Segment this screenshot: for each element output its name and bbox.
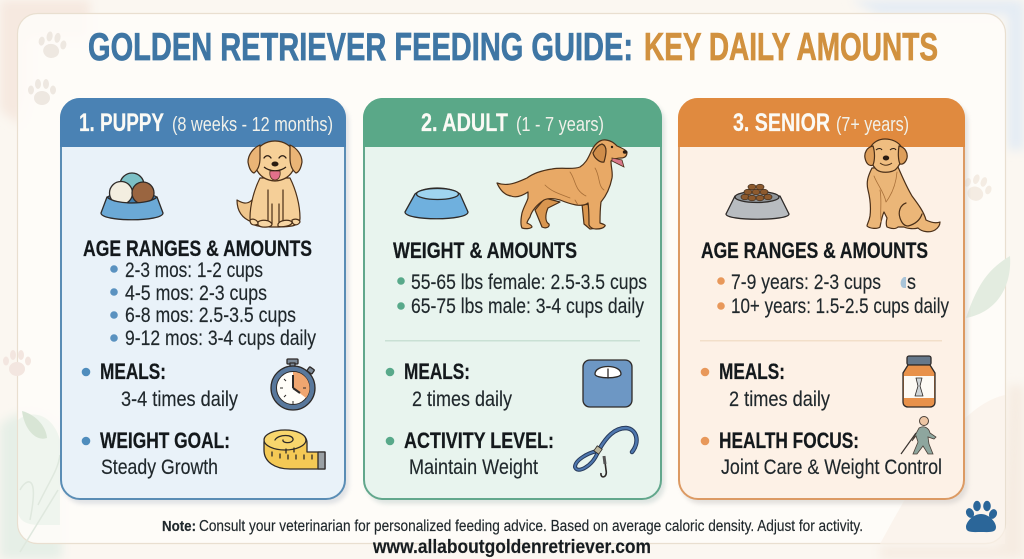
adult header bbox=[363, 98, 662, 147]
icon: food bowl with kibble scoops bbox=[101, 173, 163, 220]
panel: puppy bbox=[60, 98, 349, 504]
meals: 2 times daily bbox=[729, 388, 830, 411]
weight goal: Steady Growth bbox=[101, 456, 218, 479]
amounts list: 2-3 mos: 1-2 cups bbox=[125, 259, 263, 282]
decorative paw prints bbox=[3, 30, 995, 376]
activity level bbox=[386, 428, 554, 479]
icon: adult dog bbox=[497, 140, 627, 229]
senior header: (7+ years) bbox=[836, 114, 909, 136]
meals: MEALS: bbox=[404, 359, 470, 384]
amounts list: 4-5 mos: 2-3 cups bbox=[125, 282, 267, 305]
activity level: Maintain Weight bbox=[409, 456, 538, 479]
puppy header: 1. PUPPY bbox=[79, 109, 164, 137]
weight amounts list: 55-65 lbs female: 2.5-3.5 cups bbox=[411, 271, 647, 294]
meals: MEALS: bbox=[719, 359, 785, 384]
weight goal: WEIGHT GOAL: bbox=[100, 428, 230, 453]
adult header: 2. ADULT bbox=[421, 109, 508, 137]
weight amounts list: 65-75 lbs male: 3-4 cups daily bbox=[411, 295, 644, 318]
icon: joint supplement bottle bbox=[903, 356, 935, 407]
heading: age ranges and amounts: AGE RANGES & AMOUNTS bbox=[701, 238, 928, 263]
title: GOLDEN RETRIEVER FEEDING GUIDE: bbox=[88, 26, 633, 69]
senior header bbox=[678, 98, 965, 147]
note: Consult your veterinarian for personalized feeding advice. Based on average caloric density. Adjust for activity. bbox=[199, 518, 863, 535]
weight goal bbox=[82, 428, 230, 479]
senior amounts list: 7-9 years: 2-3 cups bbox=[731, 271, 881, 294]
senior amounts list bbox=[717, 271, 949, 318]
icon: bathroom scale bbox=[583, 360, 632, 407]
meals: 3-4 times daily bbox=[121, 388, 238, 411]
icon: water bowl bbox=[405, 188, 468, 219]
puppy header bbox=[60, 98, 346, 147]
meals: MEALS: bbox=[100, 359, 166, 384]
meals bbox=[82, 359, 238, 411]
icon: senior walking with cane bbox=[901, 416, 936, 454]
note: Note: bbox=[162, 518, 196, 535]
senior amounts list: s bbox=[907, 271, 916, 294]
icon: tape measure bbox=[264, 430, 325, 469]
puppy header: (8 weeks - 12 months) bbox=[172, 114, 333, 136]
amounts list bbox=[110, 259, 316, 350]
meals: 2 times daily bbox=[412, 388, 512, 411]
icon: senior dog bbox=[865, 139, 940, 232]
meals bbox=[701, 359, 830, 411]
heading: age ranges and amounts: AGE RANGES & AMOUNTS bbox=[83, 236, 312, 261]
senior amounts list: 10+ years: 1.5-2.5 cups daily bbox=[731, 295, 949, 318]
adult header: (1 - 7 years) bbox=[516, 114, 604, 136]
icon: blue paw bbox=[964, 501, 999, 532]
health focus: HEALTH FOCUS: bbox=[719, 428, 859, 453]
panel: adult bbox=[363, 98, 665, 504]
icon: kibble bowl bbox=[726, 184, 789, 219]
senior header: 3. SENIOR bbox=[733, 109, 830, 137]
health focus bbox=[701, 428, 942, 479]
heading: weight and amounts: WEIGHT & AMOUNTS bbox=[393, 238, 577, 263]
meals bbox=[386, 359, 512, 411]
amounts list: 9-12 mos: 3-4 cups daily bbox=[125, 327, 316, 350]
icon: stopwatch bbox=[271, 359, 315, 410]
website: www.allaboutgoldenretriever.com bbox=[372, 536, 651, 558]
health focus: Joint Care & Weight Control bbox=[721, 456, 942, 479]
amounts list: 6-8 mos: 2.5-3.5 cups bbox=[125, 304, 296, 327]
activity level: ACTIVITY LEVEL: bbox=[404, 428, 554, 453]
icon: leash bbox=[575, 428, 637, 477]
panel: senior bbox=[678, 98, 968, 504]
weight amounts list bbox=[397, 271, 647, 318]
icon: puppy bbox=[237, 141, 302, 227]
